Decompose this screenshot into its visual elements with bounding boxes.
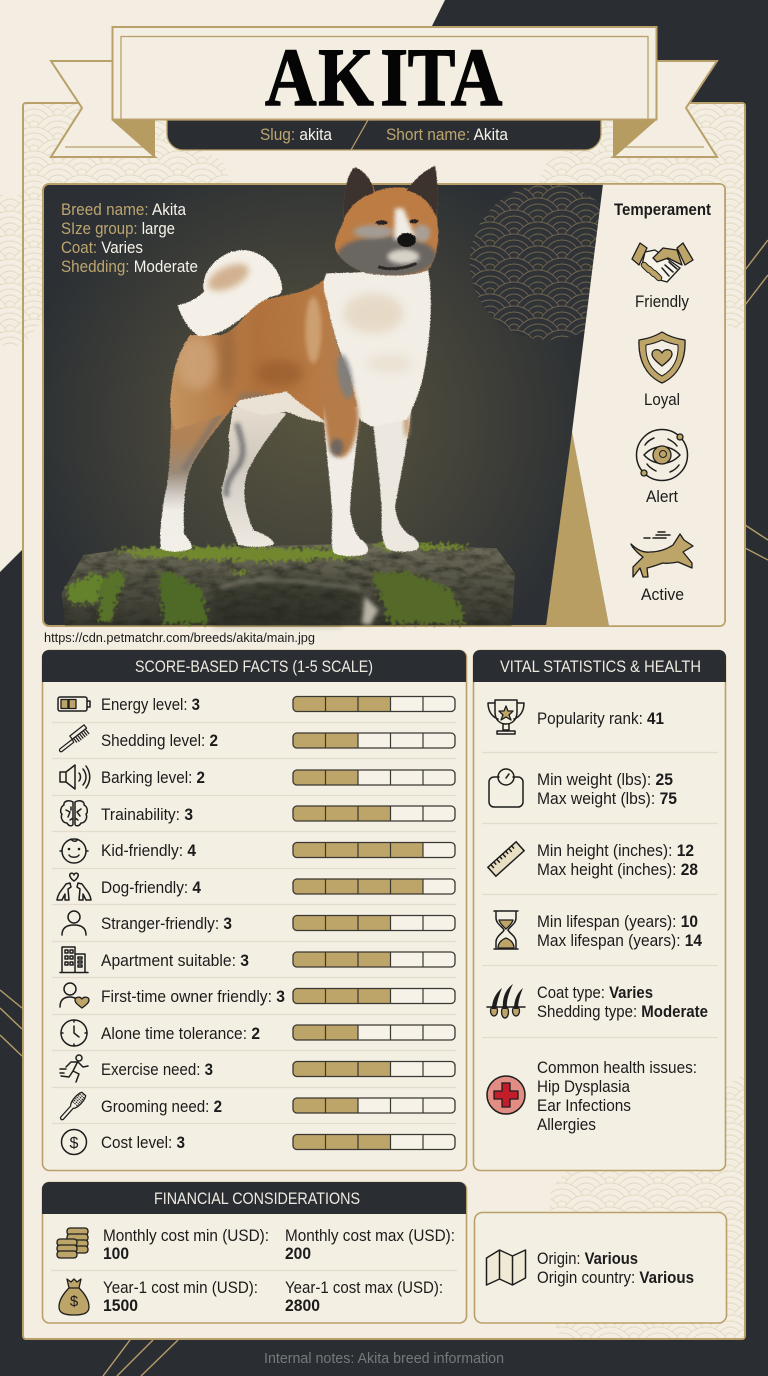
icon: map <box>486 1250 526 1285</box>
icon: trophy <box>488 700 524 734</box>
far hind leg <box>222 407 287 547</box>
panel: origin <box>474 1212 726 1323</box>
short name text: Short name: Akita <box>386 125 508 144</box>
ribbon tail: right <box>613 61 717 157</box>
monthly max <box>285 1226 455 1263</box>
row: grooming: Grooming need: 2 <box>101 1097 222 1116</box>
temperament panel <box>572 184 725 626</box>
slug bar <box>167 120 601 150</box>
row: first-time owner: First-time owner friendly: 3 <box>101 987 285 1006</box>
coat <box>537 983 708 1021</box>
row: apartment <box>60 947 455 972</box>
popularity: Popularity rank: 41 <box>537 709 664 728</box>
row: energy <box>58 695 455 714</box>
health issues <box>537 1058 697 1134</box>
icon: coins <box>57 1228 88 1258</box>
ribbon tail: left <box>51 61 155 157</box>
monthly min: 100 <box>103 1244 129 1263</box>
health issues: Common health issues: <box>537 1058 697 1077</box>
row: trainability <box>61 801 455 826</box>
breed info text: Coat: Varies <box>61 238 143 257</box>
monthly max: Monthly cost max (USD): <box>285 1226 455 1245</box>
origin text: Origin: Various <box>537 1249 638 1268</box>
height: Min height (inches): 12 <box>537 841 694 860</box>
row: cost <box>62 1130 455 1154</box>
breed info text <box>61 200 198 276</box>
health issues: Hip Dysplasia <box>537 1077 630 1096</box>
row: shedding: Shedding level: 2 <box>101 731 218 750</box>
row: barking <box>60 765 455 789</box>
lifespan: Max lifespan (years): 14 <box>537 931 702 950</box>
breed info text: Shedding: Moderate <box>61 257 198 276</box>
row: dog-friendly <box>57 873 455 900</box>
row: shedding <box>56 725 455 754</box>
gold triangle <box>546 432 609 626</box>
row: apartment: Apartment suitable: 3 <box>101 951 249 970</box>
panel: financial considerations <box>42 1182 466 1323</box>
icon: hourglass <box>494 911 518 949</box>
dog body <box>160 165 439 556</box>
far front leg <box>372 407 419 552</box>
Alert label: Alert <box>646 487 678 506</box>
health issues: Ear Infections <box>537 1096 631 1115</box>
height <box>537 841 698 879</box>
title banner <box>112 27 656 123</box>
vital header: VITAL STATISTICS & HEALTH <box>500 657 701 676</box>
icon: scale <box>489 769 523 807</box>
Active label: Active <box>641 585 684 604</box>
temperament heading: Temperament <box>614 200 711 219</box>
hero photo panel <box>42 165 726 626</box>
Friendly label: Friendly <box>635 292 689 311</box>
row: first-time owner <box>60 983 455 1008</box>
icon: handshake <box>632 243 693 282</box>
financial header: FINANCIAL CONSIDERATIONS <box>154 1189 360 1208</box>
row: alone time: Alone time tolerance: 2 <box>101 1024 260 1043</box>
origin text <box>537 1249 694 1287</box>
lifespan <box>537 912 702 950</box>
weight: Max weight (lbs): 75 <box>537 789 677 808</box>
rock <box>62 543 515 625</box>
icon: hair follicles <box>487 984 525 1018</box>
panel: vital statistics <box>473 650 726 1170</box>
row: exercise <box>60 1055 455 1082</box>
row: kid-friendly: Kid-friendly: 4 <box>101 841 196 860</box>
monthly min: Monthly cost min (USD): <box>103 1226 269 1245</box>
row: grooming <box>58 1091 455 1122</box>
tail <box>177 250 282 336</box>
icon: shield <box>639 332 685 383</box>
icon: eye <box>636 430 688 480</box>
icon: running dog <box>631 532 693 577</box>
background wave pattern <box>470 185 600 340</box>
image URL: https://cdn.petmatchr.com/breeds/akita/main.jpg <box>44 630 315 645</box>
slug text: Slug: akita <box>260 125 332 144</box>
lifespan: Min lifespan (years): 10 <box>537 912 698 931</box>
belly <box>230 387 327 423</box>
row: cost: $ <box>70 1135 79 1152</box>
row: barking: Barking level: 2 <box>101 768 205 787</box>
row: kid-friendly <box>60 839 455 863</box>
panel: score-based facts <box>42 650 466 1170</box>
year1 min: Year-1 cost min (USD): <box>103 1278 258 1297</box>
row: stranger-friendly <box>62 911 455 935</box>
year1 min <box>103 1278 258 1315</box>
row: alone time <box>61 1020 455 1046</box>
row: energy: Energy level: 3 <box>101 695 200 714</box>
weight <box>537 770 677 808</box>
shoulder <box>320 340 358 457</box>
weight: Min weight (lbs): 25 <box>537 770 673 789</box>
icon: money bag <box>59 1279 89 1315</box>
row: cost: Cost level: 3 <box>101 1133 185 1152</box>
body <box>170 280 360 430</box>
monthly min <box>103 1226 269 1263</box>
head <box>335 165 439 277</box>
origin text: Origin country: Various <box>537 1268 694 1287</box>
Loyal label: Loyal <box>644 390 680 409</box>
financial header <box>42 1182 466 1214</box>
score header <box>42 650 466 682</box>
coat: Shedding type: Moderate <box>537 1002 708 1021</box>
score header: SCORE-BASED FACTS (1-5 SCALE) <box>135 657 373 676</box>
height: Max height (inches): 28 <box>537 860 698 879</box>
title: AKITA <box>265 31 502 123</box>
near front leg <box>323 407 368 556</box>
coat: Coat type: Varies <box>537 983 653 1002</box>
row: dog-friendly: Dog-friendly: 4 <box>101 878 201 897</box>
year1 max: 2800 <box>285 1296 320 1315</box>
near hind leg <box>160 393 232 552</box>
icon: ruler <box>488 842 524 876</box>
year1 min: 1500 <box>103 1296 138 1315</box>
year1 max: Year-1 cost max (USD): <box>285 1278 443 1297</box>
vital header <box>473 650 726 682</box>
breed info text: SIze group: large <box>61 219 175 238</box>
health issues: Allergies <box>537 1115 596 1134</box>
row: stranger-friendly: Stranger-friendly: 3 <box>101 914 232 933</box>
chest <box>324 270 431 427</box>
row: trainability: Trainability: 3 <box>101 805 193 824</box>
footer note: Internal notes: Akita breed information <box>264 1350 504 1367</box>
dog photo illustration <box>62 165 515 625</box>
monthly max: 200 <box>285 1244 311 1263</box>
icon: medical cross <box>487 1076 525 1114</box>
breed info text: Breed name: Akita <box>61 200 186 219</box>
icon: money bag: $ <box>70 1293 79 1310</box>
year1 max <box>285 1278 443 1315</box>
row: exercise: Exercise need: 3 <box>101 1060 213 1079</box>
